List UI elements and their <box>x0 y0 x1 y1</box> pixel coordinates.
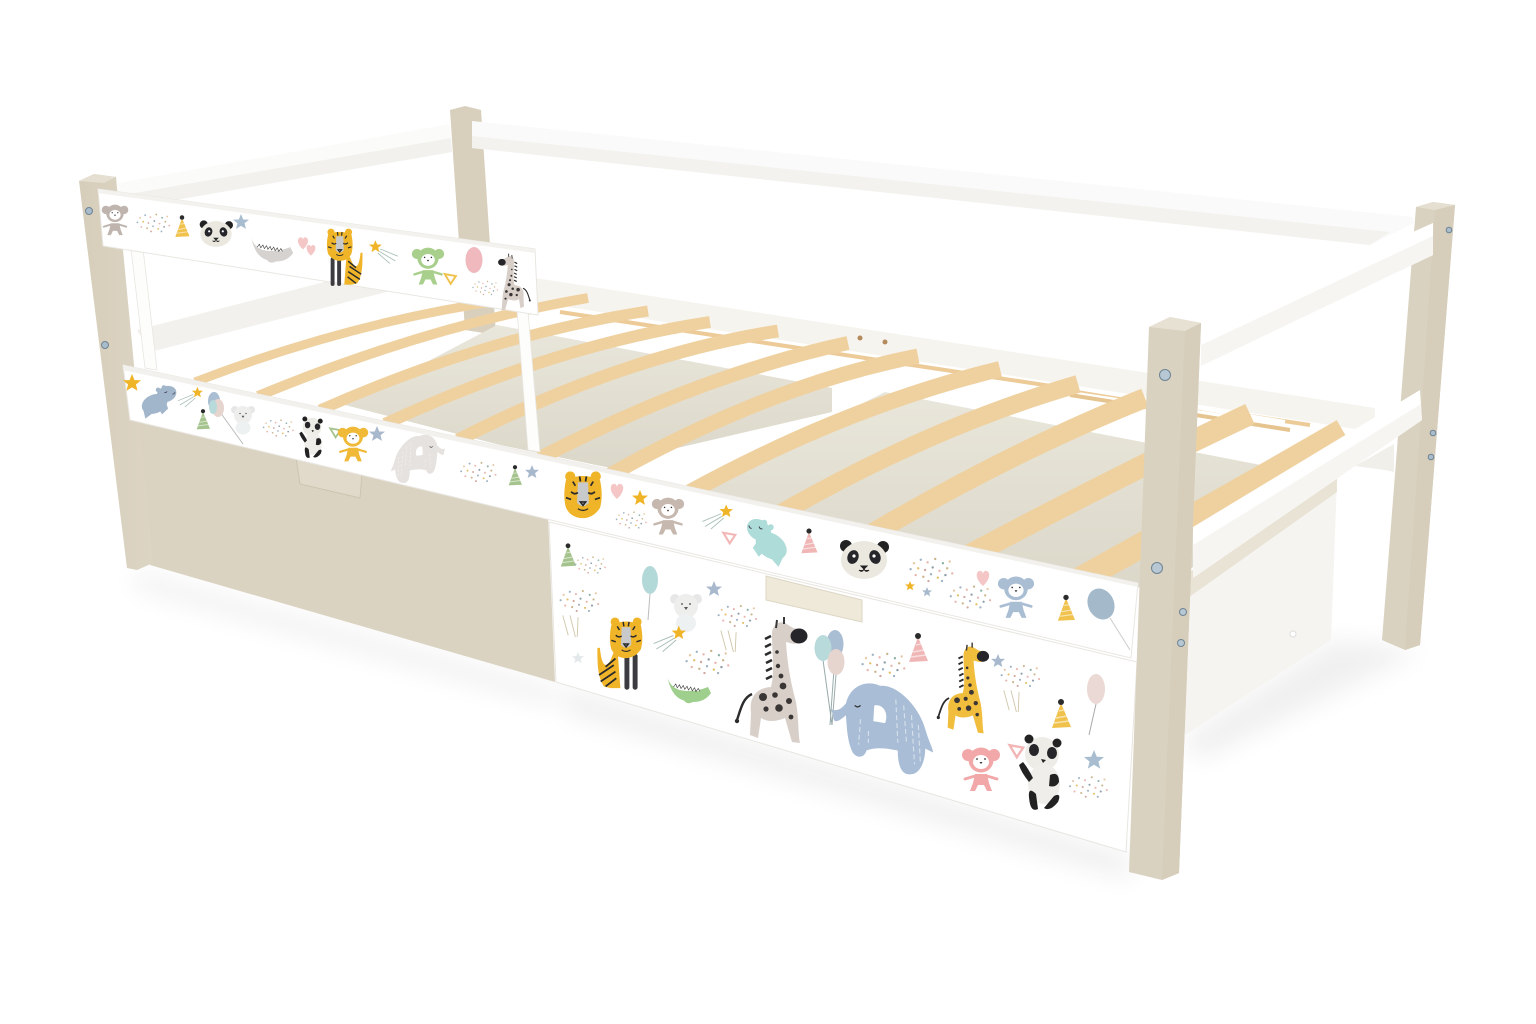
guard rail uprights <box>130 240 540 452</box>
heart pink <box>611 484 623 499</box>
drawer artwork <box>560 543 1108 810</box>
front left post <box>79 174 153 570</box>
panda face <box>840 540 889 579</box>
printed guard rail <box>98 189 538 315</box>
panda <box>299 416 323 458</box>
blue star small <box>991 654 1005 667</box>
hat green <box>197 409 210 429</box>
grey giraffe <box>735 617 808 743</box>
pink monkey <box>962 748 1000 791</box>
blue star <box>369 426 385 441</box>
pink flag <box>723 533 735 543</box>
right lower side rail <box>1193 390 1422 578</box>
blue star <box>233 214 249 229</box>
hippo blue <box>136 382 182 421</box>
dots right <box>1069 776 1108 798</box>
side of right drawer <box>1185 478 1337 735</box>
bolts on front right post <box>1152 370 1186 646</box>
balloon blue <box>1082 584 1130 650</box>
grey monkey <box>102 205 128 235</box>
blue star right <box>1084 750 1104 769</box>
panda face <box>200 220 233 247</box>
panda sitting <box>1019 734 1062 810</box>
dots <box>685 650 729 674</box>
left lower rail <box>137 246 465 352</box>
balloons <box>208 392 243 444</box>
dots <box>616 511 647 529</box>
blue elephant <box>831 683 933 774</box>
rail end behind right post <box>1355 444 1394 472</box>
pink balloon <box>466 247 482 273</box>
dots <box>472 281 498 295</box>
back left post <box>450 106 496 335</box>
left drawer handle <box>296 458 362 498</box>
printed front rail <box>123 365 1138 658</box>
blue star <box>706 581 722 596</box>
party hat yellow <box>1052 699 1071 728</box>
right drawer handle <box>766 576 862 622</box>
shooting star <box>702 504 733 529</box>
pink flag <box>1010 745 1023 757</box>
bolts on back right post <box>1428 227 1452 460</box>
pale bear <box>670 594 702 632</box>
back top rail <box>472 121 1414 245</box>
pale elephant <box>391 435 445 483</box>
front right post <box>1129 317 1201 880</box>
balloon bunch <box>814 630 844 725</box>
left drawer interior <box>345 325 832 470</box>
bolts on left post <box>86 208 108 348</box>
yellow monkey <box>338 427 368 461</box>
pink hearts <box>298 237 315 256</box>
left drawer <box>130 420 555 682</box>
hat pink <box>801 529 818 553</box>
teal balloon <box>642 566 658 620</box>
star yellow <box>632 490 648 505</box>
right drawer <box>549 522 1137 852</box>
confetti dots <box>575 556 606 574</box>
heart pink <box>977 571 989 586</box>
standing tiger <box>597 617 642 690</box>
star yellow <box>123 374 141 391</box>
right top side rail <box>1201 223 1433 366</box>
back right post <box>1382 202 1455 650</box>
dots <box>136 214 170 232</box>
giraffe <box>498 254 531 310</box>
cross battens under slats <box>560 312 1310 430</box>
green monkey <box>412 248 444 285</box>
holes in back rail <box>858 336 888 344</box>
hat yellow <box>175 215 190 237</box>
tiger face <box>564 471 602 518</box>
dots <box>909 558 953 582</box>
back lower rail <box>535 278 1375 432</box>
fireworks right <box>1001 665 1040 712</box>
star yellow small <box>905 581 915 590</box>
party hat pink <box>909 633 928 662</box>
hat green <box>509 465 522 485</box>
shooting star <box>654 626 686 652</box>
wooden slats <box>195 298 1343 580</box>
green crocodile <box>668 678 711 703</box>
party hat green <box>561 543 576 567</box>
hat yellow <box>1058 595 1075 621</box>
floor shadow <box>130 570 1420 880</box>
fireworks left <box>560 590 599 637</box>
grey crocodile <box>251 238 293 263</box>
dots <box>263 419 294 437</box>
yellow giraffe <box>937 643 989 733</box>
dots <box>950 585 991 609</box>
teal hippo <box>736 513 796 569</box>
yellow flag <box>445 274 456 284</box>
grey monkey <box>652 498 684 535</box>
dots <box>460 462 496 482</box>
pale star <box>572 652 584 663</box>
blue monkey <box>998 577 1034 618</box>
fireworks centre <box>718 605 757 652</box>
pink balloon <box>1087 674 1105 735</box>
green flag <box>330 428 340 437</box>
shooting star <box>178 387 203 407</box>
pale bear <box>231 406 255 434</box>
right drawer interior <box>690 392 1338 590</box>
dots <box>861 653 905 677</box>
shooting star <box>369 240 398 263</box>
left top rail <box>118 124 452 210</box>
star blue small <box>922 587 932 596</box>
star blue <box>525 465 539 478</box>
standing tiger <box>327 229 362 286</box>
